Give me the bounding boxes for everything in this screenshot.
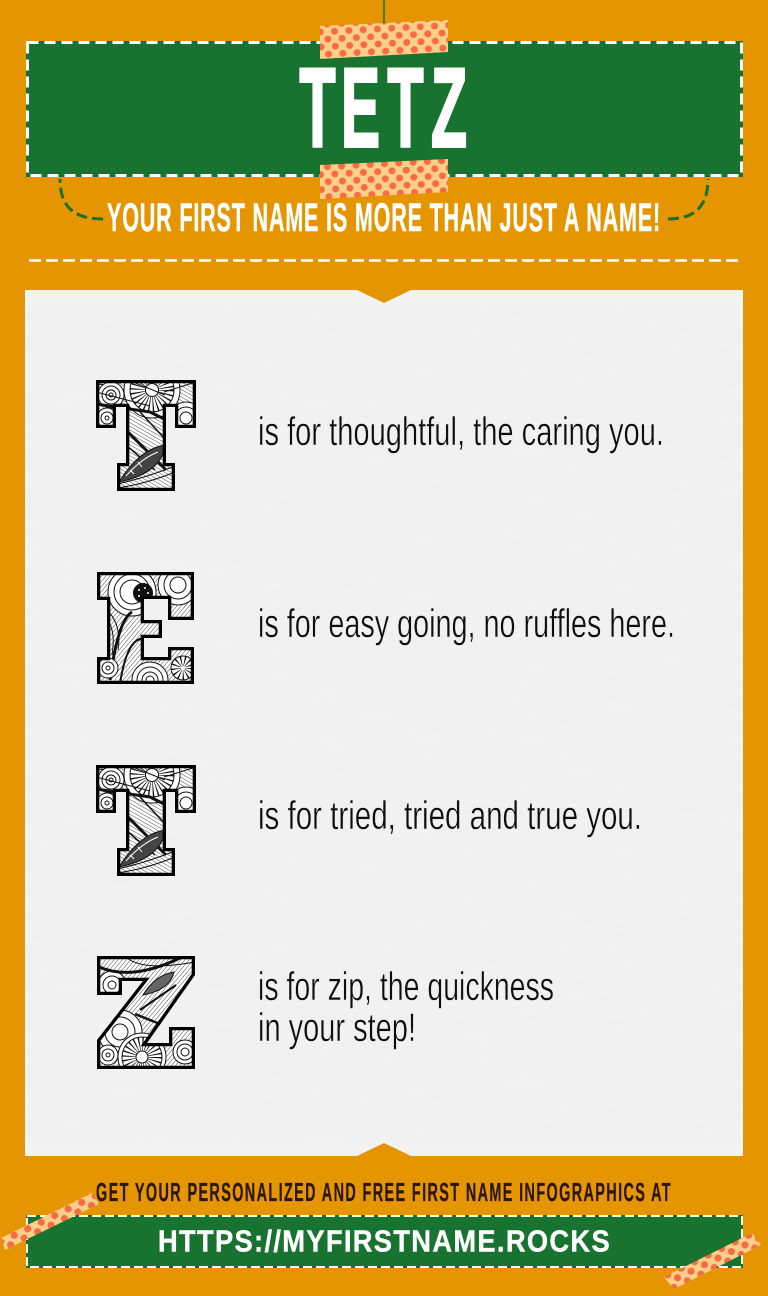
letter T second [96, 765, 196, 876]
tape left [1, 1193, 99, 1250]
footer banner [26, 1215, 743, 1268]
tape right [664, 1233, 761, 1289]
text line Z: in your step! [258, 1006, 416, 1050]
letter E [97, 572, 194, 684]
letter Z [97, 956, 195, 1069]
title: E [341, 46, 380, 170]
url: HTTPS://MYFIRSTNAME.ROCKS [158, 1224, 611, 1258]
text line T second: is for tried, tried and true you. [258, 794, 642, 838]
tape top [320, 20, 448, 59]
tape bottom [320, 159, 448, 199]
title banner [26, 41, 743, 177]
content panel [25, 290, 743, 1156]
title: T [388, 46, 424, 170]
curved connector right [668, 179, 708, 219]
text line Z: is for zip, the quickness [258, 965, 554, 1009]
title [300, 46, 467, 170]
paper texture [25, 305, 743, 1141]
dashed divider [29, 259, 738, 262]
curved connector left [60, 179, 103, 219]
letter T [96, 380, 196, 491]
title: Z [431, 46, 467, 170]
text line Z [258, 965, 554, 1050]
title: T [300, 46, 336, 170]
hanging string [383, 0, 385, 24]
